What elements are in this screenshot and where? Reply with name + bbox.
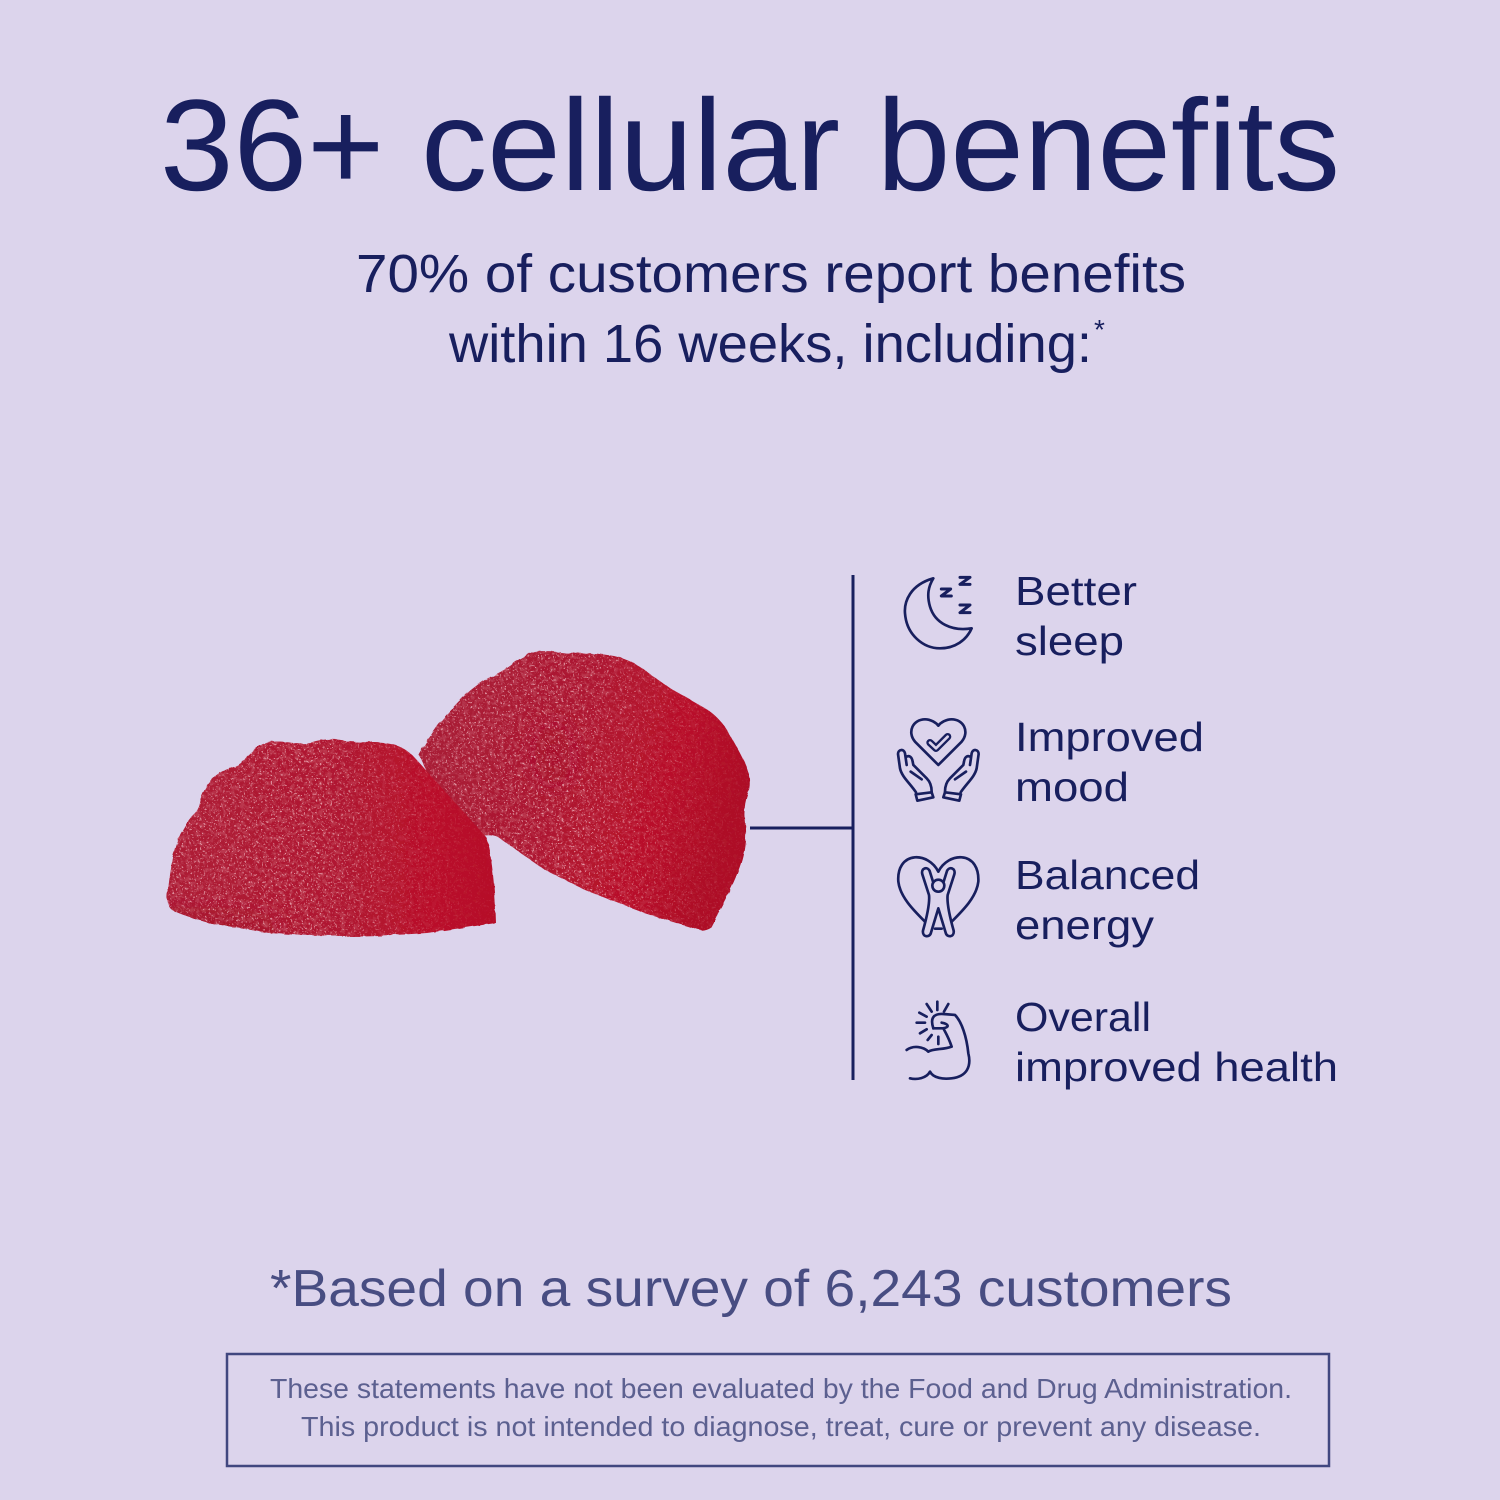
label: improved mood: mood [1015,764,1129,810]
subtitle [356,244,1186,374]
subtitle: within 16 weeks, including: [448,314,1092,374]
icon: person in heart [898,857,978,936]
disclaimer box: These statements have not been evaluated by the Food and Drug Administration. [270,1373,1292,1404]
label: balanced energy: energy [1015,902,1155,948]
subtitle: * [1094,314,1105,345]
benefit: overall improved health [907,994,1338,1090]
gummy: left [166,738,496,937]
connector lines [750,575,853,1080]
disclaimer box: This product is not intended to diagnose, treat, cure or prevent any disease. [301,1411,1261,1442]
label: balanced energy [1015,852,1200,948]
benefit: improved mood [898,714,1204,810]
label: overall improved health: improved health [1015,1044,1338,1090]
label: better sleep [1015,568,1137,664]
title: 36+ cellular benefits [160,72,1340,218]
gummy: right [418,650,750,931]
label: better sleep: sleep [1015,618,1124,664]
benefit: better sleep [905,568,1137,664]
subtitle: 70% of customers report benefits [356,244,1186,304]
label: overall improved health [1015,994,1338,1090]
icon: moon [905,577,972,648]
icon: flexed arm [907,1002,969,1079]
icon: heart in hands [898,719,979,801]
label: overall improved health: Overall [1015,994,1151,1040]
label: improved mood [1015,714,1204,810]
survey footnote: *Based on a survey of 6,243 customers [270,1260,1232,1318]
gummies image [166,650,750,937]
label: improved mood: Improved [1015,714,1204,760]
label: balanced energy: Balanced [1015,852,1200,898]
label: better sleep: Better [1015,568,1137,614]
disclaimer box [227,1354,1329,1466]
benefit: balanced energy [898,852,1200,948]
